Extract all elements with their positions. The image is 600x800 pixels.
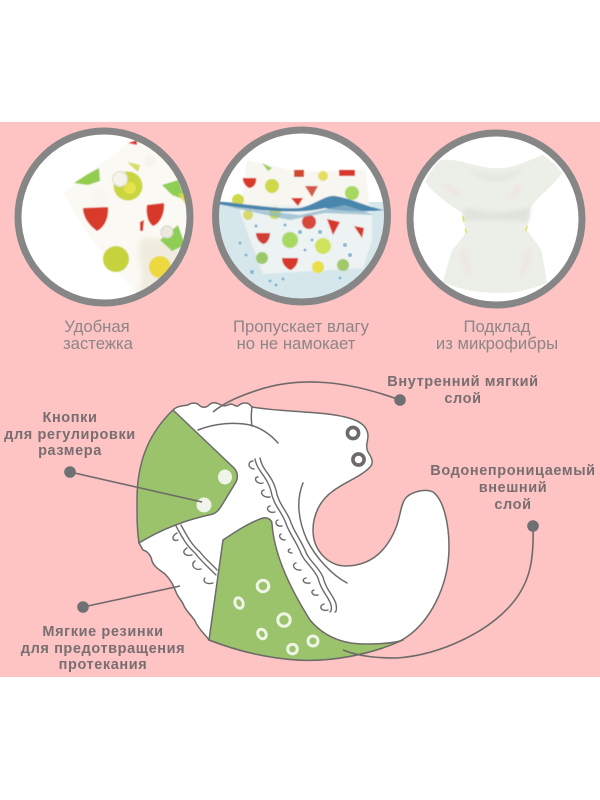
label: snaps: Кнопки <box>42 410 98 426</box>
caption: lining: Подклад <box>464 317 531 336</box>
leader: waterproof outer layer <box>343 520 539 658</box>
label: snaps: размера <box>38 443 102 459</box>
elastic tick marks <box>173 461 328 610</box>
diaper illustration <box>137 403 449 660</box>
photo circle: fastener <box>18 130 200 310</box>
photo circle: water <box>210 130 400 312</box>
leader: soft elastics <box>77 586 180 613</box>
caption: lining: из микрофибры <box>436 334 558 353</box>
photo circle: microfibre lining <box>410 133 582 305</box>
diaper white body <box>139 403 449 660</box>
green panel: outer shell <box>209 518 403 660</box>
grey rings on tab <box>347 427 364 465</box>
pink background panel <box>0 122 600 677</box>
label: snaps: для регулировки <box>4 427 136 443</box>
caption: water: Пропускает влагу <box>233 317 370 336</box>
holes on outer shell <box>233 580 318 654</box>
snap dots on wing <box>196 470 232 512</box>
caption: fastener: застежка <box>63 334 134 353</box>
label: outer layer: Водонепроницаемый <box>430 463 596 479</box>
green panel: upper wing <box>137 410 237 543</box>
label: inner layer: слой <box>444 391 482 407</box>
label: inner layer: Внутренний мягкий <box>387 374 539 390</box>
caption: fastener: Удобная <box>64 317 130 336</box>
caption: water: но не намокает <box>237 334 356 353</box>
leader: snaps <box>64 466 202 502</box>
label: outer layer: внешний <box>479 480 547 496</box>
label: elastics: для предотвращения <box>21 641 185 657</box>
label: elastics: протекания <box>59 657 147 673</box>
leader: inner soft layer <box>213 382 406 412</box>
label: elastics: Мягкие резинки <box>42 624 164 640</box>
label: outer layer: слой <box>494 497 532 513</box>
elastic wavy lines <box>176 458 336 612</box>
inner seams <box>198 407 347 583</box>
